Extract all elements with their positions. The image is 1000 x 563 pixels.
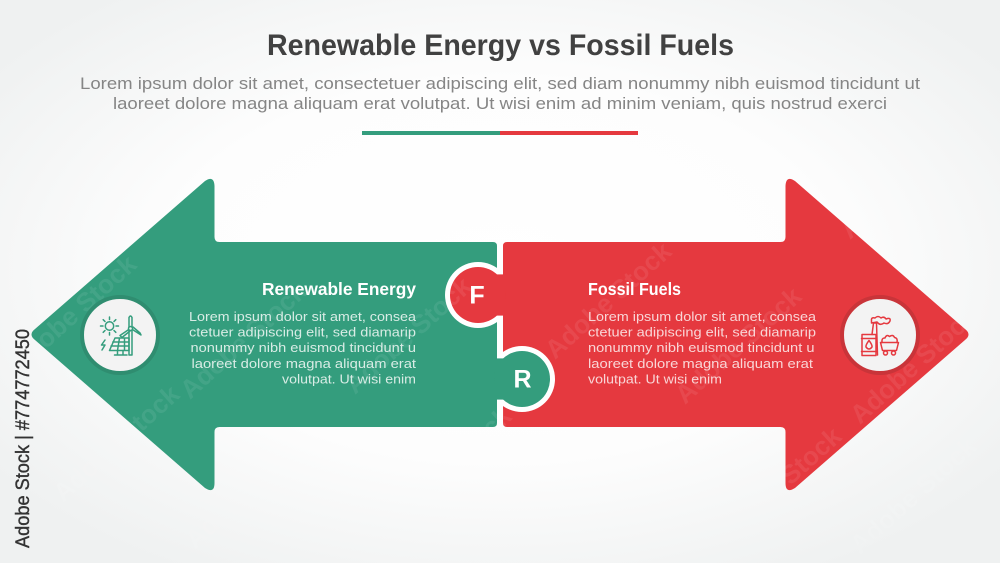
text block: fossil fuels: ctetuer adipiscing elit, sed diamarip: [588, 326, 816, 340]
text: Adobe Stock: [539, 235, 678, 364]
text: Adobe Stock: [844, 300, 983, 429]
text block: fossil fuels: nonummy nibh euismod tincidunt u: [588, 341, 815, 355]
text: Adobe Stock: [374, 60, 513, 189]
heading: renewable energy: Renewable Energy: [262, 279, 416, 299]
text: Adobe Stock: [39, 55, 178, 184]
text block: renewable energy: laoreet dolore magna aliquam erat: [192, 357, 417, 371]
heading: fossil fuels: Fossil Fuels: [588, 279, 681, 299]
text block: renewable energy: Lorem ipsum dolor sit amet, consea: [189, 310, 416, 324]
subtitle text block: [80, 74, 920, 113]
panel: renewable energy arrow: [32, 179, 497, 490]
text block: renewable energy: nonummy nibh euismod tincidunt u: [190, 341, 416, 355]
puzzle tab: R: [494, 351, 550, 407]
text: Adobe Stock: [844, 430, 983, 559]
puzzle tab: F: F: [469, 282, 485, 310]
text: Adobe Stock: [669, 280, 808, 409]
text: Adobe Stock: [179, 35, 318, 164]
watermark credit: Adobe Stock | #774772450: [12, 329, 34, 548]
subtitle text block: laoreet dolore magna aliquam erat volutpat. Ut wisi enim ad minim veniam, quis nostrud exerci: [113, 94, 887, 113]
text: Adobe Stock: [47, 378, 186, 507]
text: Adobe Stock: [379, 400, 518, 529]
text: Adobe Stock: [699, 75, 838, 204]
text block: fossil fuels: [588, 310, 816, 386]
text block: renewable energy: volutpat. Ut wisi enim: [282, 372, 416, 386]
text block: renewable energy: [189, 310, 417, 386]
puzzle tab: R: R: [513, 366, 532, 394]
text block: fossil fuels: laoreet dolore magna aliquam erat: [588, 357, 814, 371]
title: Renewable Energy vs Fossil Fuels: [267, 29, 734, 62]
icon: solar panel and wind turbine: [82, 297, 158, 373]
text: Adobe Stock: [339, 270, 478, 399]
panel: fossil fuels arrow: [503, 179, 968, 490]
puzzle tab: F: [450, 267, 506, 323]
text: Adobe Stock: [504, 50, 643, 179]
text: Adobe Stock: [504, 430, 643, 559]
text: Adobe Stock: [179, 425, 318, 554]
title divider: [362, 131, 638, 135]
text: Adobe Stock: [709, 420, 848, 549]
text: Adobe Stock: [834, 115, 973, 244]
text: Adobe Stock: [174, 275, 313, 404]
text block: fossil fuels: volutpat. Ut wisi enim: [588, 372, 722, 386]
text block: fossil fuels: Lorem ipsum dolor sit amet, consea: [588, 310, 816, 324]
text: Adobe Stock: [4, 248, 143, 377]
icon: fossil fuel factory, oil barrel and coal cart: [842, 297, 918, 373]
subtitle text block: Lorem ipsum dolor sit amet, consectetuer adipiscing elit, sed diam nonummy nibh euismod tincidunt ut: [80, 74, 920, 93]
text block: renewable energy: ctetuer adipiscing elit, sed diamarip: [189, 326, 416, 340]
